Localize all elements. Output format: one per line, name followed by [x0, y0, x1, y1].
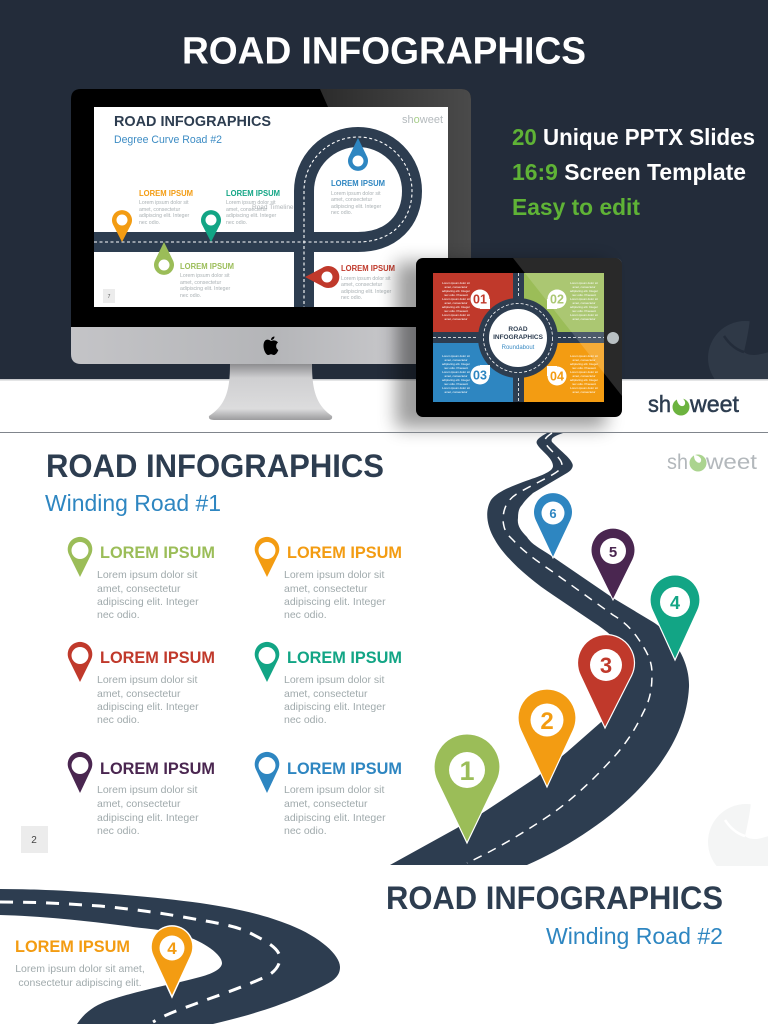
slide entry: blue: amet, consectetur — [331, 197, 373, 203]
legend item: blue: amet, consectetur — [284, 798, 368, 810]
slide page number — [103, 289, 115, 303]
quadrant text: green: nec odio. Praesent — [572, 309, 596, 313]
slide ghost text: Road Timeline — [252, 204, 294, 211]
legend item: red: LOREM IPSUM — [100, 648, 215, 667]
legend item: teal: nec odio. — [284, 714, 327, 726]
slide entry: orange: LOREM IPSUM — [139, 189, 193, 198]
slide entry: blue: adipiscing elit. Integer — [331, 204, 381, 210]
legend item: green: Lorem ipsum dolor sit — [97, 569, 197, 581]
legend item: red: Lorem ipsum dolor sit — [97, 674, 197, 686]
quadrant text: blue: Lorem ipsum dolor sit — [442, 370, 470, 374]
quadrant text: blue: amet, consectetur — [445, 374, 468, 378]
slide entry: green: adipiscing elit. Integer — [180, 286, 230, 292]
badge 02 — [547, 290, 566, 309]
legend item: blue: Lorem ipsum dolor sit — [284, 784, 384, 796]
quadrant text: red: amet, consectetur — [445, 301, 468, 305]
quadrant text: red: amet, consectetur — [445, 317, 468, 321]
feature list — [512, 124, 755, 220]
tablet home button — [607, 332, 619, 344]
quadrant text: red: Lorem ipsum dolor sit — [442, 313, 470, 317]
road pin 3: 3 — [600, 653, 612, 678]
watermark: slide logo mark — [708, 804, 768, 866]
legend item: teal: amet, consectetur — [284, 688, 368, 700]
page number: 2 — [31, 835, 37, 846]
quadrant text: blue: amet, consectetur — [445, 390, 468, 394]
quadrant text: red: Lorem ipsum dolor sit — [442, 281, 470, 285]
legend item: orange: amet, consectetur — [284, 583, 368, 595]
quadrant text: orange: adipiscing elit. Integer — [570, 378, 598, 382]
slide entry: blue: Lorem ipsum dolor sit — [331, 191, 381, 197]
badge 01 — [470, 290, 490, 309]
quadrant text: orange: nec odio. Praesent — [572, 382, 596, 386]
legend item: red: nec odio. — [97, 714, 140, 726]
quadrant text: green: Lorem ipsum dolor sit — [570, 297, 598, 301]
badge 04 — [547, 366, 566, 386]
feature list: Easy to edit — [512, 194, 640, 220]
roundabout: Roundabout — [502, 345, 535, 351]
legend item: teal: LOREM IPSUM — [287, 648, 402, 667]
badge 01: 01 — [473, 292, 487, 306]
quadrant text: blue: nec odio. Praesent — [444, 366, 468, 370]
legend item: purple: Lorem ipsum dolor sit — [97, 784, 197, 796]
road pin 4 — [650, 575, 700, 660]
legend item: purple: adipiscing elit. Integer — [97, 812, 199, 824]
slide entry: green: Lorem ipsum dolor sit — [180, 273, 230, 279]
slide entry: teal: nec odio. — [226, 220, 247, 226]
quadrant text: red: adipiscing elit. Integer — [442, 305, 470, 309]
feature list: 16:9 Screen Template — [512, 159, 746, 185]
legend item: purple: amet, consectetur — [97, 798, 181, 810]
quadrant text: green: Lorem ipsum dolor sit — [570, 281, 598, 285]
quadrant text: orange: amet, consectetur — [573, 374, 596, 378]
legend item: orange: nec odio. — [284, 609, 327, 621]
quadrant text: orange: nec odio. Praesent — [572, 366, 596, 370]
quadrant text: red: nec odio. Praesent — [444, 293, 468, 297]
quadrant text: orange: adipiscing elit. Integer — [570, 362, 598, 366]
road 1 — [390, 433, 689, 865]
badge 02: 02 — [550, 292, 564, 306]
slide entry: orange — [112, 189, 193, 242]
quadrant text: green: adipiscing elit. Integer — [570, 289, 598, 293]
legend item: orange: adipiscing elit. Integer — [284, 596, 386, 608]
slide entry: blue — [331, 138, 385, 216]
road pin 5 — [591, 528, 635, 600]
title: ROAD INFOGRAPHICS — [182, 30, 586, 72]
subtitle: Winding Road #2 — [546, 923, 723, 949]
feature list: 20 Unique PPTX Slides — [512, 124, 755, 150]
logo: showeet header: weet — [689, 391, 740, 417]
logo: showeet gray: weet — [705, 451, 757, 474]
degree curve road — [94, 137, 412, 307]
legend item: red: adipiscing elit. Integer — [97, 701, 199, 713]
legend item: blue — [255, 752, 402, 837]
tablet glass reflection — [513, 258, 622, 396]
slide entry: green: nec odio. — [180, 293, 201, 299]
legend item: green — [68, 537, 215, 621]
tablet quadrants — [433, 273, 604, 402]
slide entry: orange: amet, consectetur — [139, 207, 181, 213]
slide entry: green: LOREM IPSUM — [180, 262, 234, 271]
quadrant text: blue: Lorem ipsum dolor sit — [442, 354, 470, 358]
divider line — [0, 432, 768, 433]
legend item: teal: Lorem ipsum dolor sit — [284, 674, 384, 686]
quadrant text: red: amet, consectetur — [445, 285, 468, 289]
slide logo: showeet — [402, 114, 443, 126]
badge 03 — [470, 365, 490, 384]
legend item: orange: Lorem ipsum dolor sit — [284, 569, 384, 581]
road pin 2 — [518, 689, 576, 787]
legend item: red — [68, 642, 215, 726]
road 2 text: Lorem ipsum dolor sit amet, — [15, 963, 145, 975]
quadrant text: orange: Lorem ipsum dolor sit — [570, 354, 598, 358]
road pin 6: 6 — [549, 506, 557, 521]
quadrant text: green: amet, consectetur — [573, 317, 596, 321]
panel: desktop monitor mockup — [71, 89, 471, 420]
road 2 pin 4 — [151, 926, 193, 997]
legend item: green: nec odio. — [97, 609, 140, 621]
logo: showeet header — [648, 391, 740, 417]
legend item: blue: adipiscing elit. Integer — [284, 812, 386, 824]
road pin 5: 5 — [609, 544, 617, 561]
quadrant text: blue: amet, consectetur — [445, 358, 468, 362]
roundabout: ROAD — [508, 326, 528, 333]
quadrant text: green: amet, consectetur — [573, 301, 596, 305]
legend item: blue: nec odio. — [284, 825, 327, 837]
slide heading: ROAD INFOGRAPHICS — [114, 113, 271, 130]
panel: tablet mockup — [396, 258, 622, 428]
quadrant text: red: adipiscing elit. Integer — [442, 289, 470, 293]
slide entry: green — [154, 242, 234, 299]
quadrant text: orange: Lorem ipsum dolor sit — [570, 370, 598, 374]
slide entry: red — [305, 264, 395, 301]
quadrant text: red: nec odio. Praesent — [444, 309, 468, 313]
legend item: green: adipiscing elit. Integer — [97, 596, 199, 608]
quadrant text: orange: amet, consectetur — [573, 390, 596, 394]
heading: ROAD INFOGRAPHICS — [386, 880, 723, 916]
quadrant text: blue: nec odio. Praesent — [444, 382, 468, 386]
slide entry: red: nec odio. — [341, 295, 362, 301]
legend item: green: amet, consectetur — [97, 583, 181, 595]
road 2 — [0, 889, 340, 1024]
road 2 pin 4: 4 — [167, 939, 177, 958]
slide entry: teal — [201, 189, 280, 242]
legend item: teal — [255, 642, 402, 726]
panel: winding road 1 — [21, 433, 768, 880]
legend item: purple — [68, 752, 215, 837]
slide entry: blue: nec odio. — [331, 210, 352, 216]
watermark: header logo mark — [708, 321, 768, 379]
quadrant text: green: Lorem ipsum dolor sit — [570, 313, 598, 317]
slide entry: orange: Lorem ipsum dolor sit — [139, 200, 189, 206]
slide entry: teal: LOREM IPSUM — [226, 189, 280, 198]
quadrant text: blue: Lorem ipsum dolor sit — [442, 386, 470, 390]
road pin 1: 1 — [459, 756, 475, 786]
road pin 6 — [534, 493, 572, 558]
slide entry: red: adipiscing elit. Integer — [341, 289, 391, 295]
badge 03: 03 — [473, 368, 487, 382]
legend item: purple: nec odio. — [97, 825, 140, 837]
panel: winding road 2 — [0, 880, 723, 1024]
legend item: green: LOREM IPSUM — [100, 543, 215, 562]
icon: apple logo — [264, 336, 278, 355]
panel: dark header background — [0, 0, 768, 380]
road pin 1 — [434, 734, 500, 843]
logo: showeet gray: sh — [667, 451, 688, 474]
monitor body — [71, 89, 471, 327]
slide entry: green: amet, consectetur — [180, 280, 222, 286]
monitor stand — [209, 364, 332, 420]
quadrant text: green: adipiscing elit. Integer — [570, 305, 598, 309]
monitor screen slide — [94, 107, 448, 307]
road 2 label: LOREM IPSUM — [15, 937, 130, 956]
legend item: blue: LOREM IPSUM — [287, 759, 402, 778]
legend item: red: amet, consectetur — [97, 688, 181, 700]
slide subtitle: Degree Curve Road #2 — [114, 134, 222, 146]
roundabout — [478, 298, 558, 378]
slide page number: 7 — [108, 294, 111, 300]
slide entry: teal: adipiscing elit. Integer — [226, 213, 276, 219]
page number — [21, 826, 48, 853]
quadrant text: green: amet, consectetur — [573, 285, 596, 289]
roundabout: INFOGRAPHICS — [493, 334, 544, 341]
logo: showeet gray — [667, 451, 757, 474]
subtitle: Winding Road #1 — [45, 490, 221, 516]
road pin 4: 4 — [670, 593, 680, 613]
road pin 2: 2 — [540, 708, 554, 735]
quadrant text: orange: amet, consectetur — [573, 358, 596, 362]
legend item: orange — [255, 537, 402, 621]
slide entry: orange: nec odio. — [139, 220, 160, 226]
slide entry: teal: Lorem ipsum dolor sit — [226, 200, 276, 206]
quadrant text: green: nec odio. Praesent — [572, 293, 596, 297]
legend item: purple: LOREM IPSUM — [100, 759, 215, 778]
slide entry: blue: LOREM IPSUM — [331, 179, 385, 188]
quadrant text: red: Lorem ipsum dolor sit — [442, 297, 470, 301]
legend item: teal: adipiscing elit. Integer — [284, 701, 386, 713]
legend item: orange: LOREM IPSUM — [287, 543, 402, 562]
slide entry: red: Lorem ipsum dolor sit — [341, 276, 391, 282]
badge 04: 04 — [550, 370, 564, 384]
heading: ROAD INFOGRAPHICS — [46, 448, 384, 484]
road 2 text: consectetur adipiscing elit. — [18, 977, 142, 989]
slide entry: red: amet, consectetur — [341, 282, 383, 288]
road pin 3 — [578, 634, 634, 728]
slide entry: red: LOREM IPSUM — [341, 264, 395, 273]
slide entry: teal: amet, consectetur — [226, 207, 268, 213]
logo: showeet header: sh — [648, 391, 671, 417]
quadrant text: blue: adipiscing elit. Integer — [442, 378, 470, 382]
slide entry: orange: adipiscing elit. Integer — [139, 213, 189, 219]
quadrant text: orange: Lorem ipsum dolor sit — [570, 386, 598, 390]
quadrant text: blue: adipiscing elit. Integer — [442, 362, 470, 366]
